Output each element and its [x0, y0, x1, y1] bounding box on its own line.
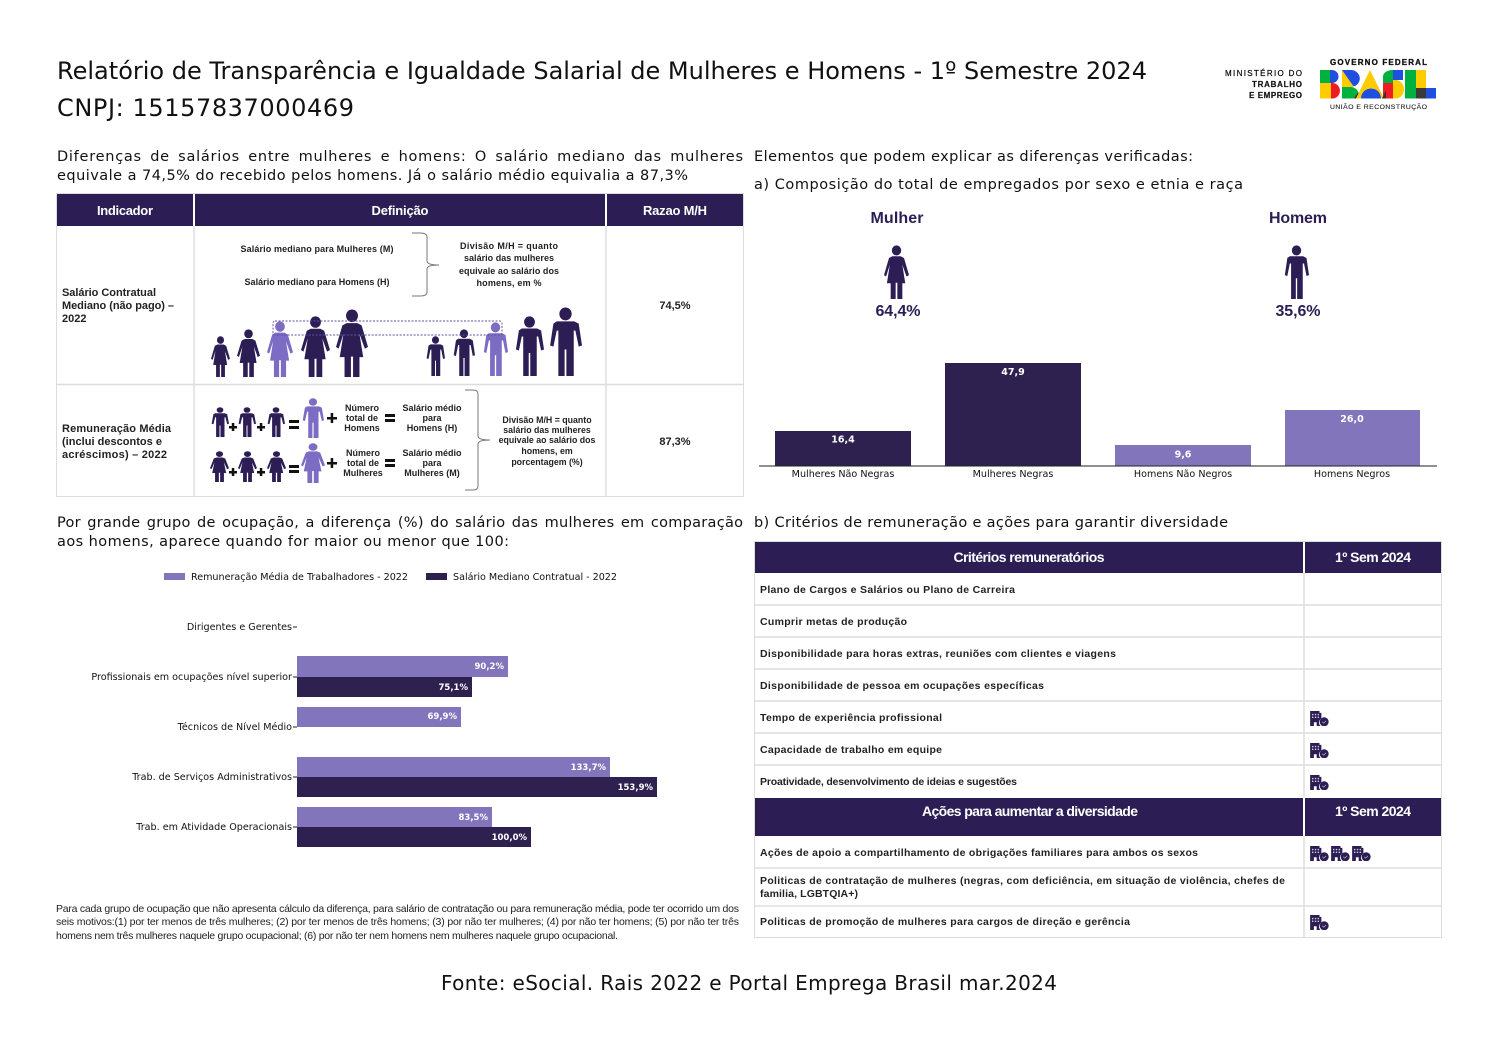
row: average pay: Divisão M/H = quanto [502, 415, 592, 425]
row: contractual median: equivale ao salário dos [459, 266, 559, 276]
row: average pay: equivale ao salário dos [499, 435, 596, 445]
heading: explanation elements: Elementos que podem explicar as diferenças verificadas: [754, 149, 1193, 165]
row: average pay: Homens [344, 423, 380, 433]
heading: explanation elements [754, 149, 1243, 193]
footnote: seis motivos:(1) por ter menos de três mulheres; (2) por ter menos de três homens; (3) por não ter mulheres; (4) por não ter homens; (5) por não ter três [56, 916, 739, 928]
bar chart: occupation: 133,7% [571, 763, 606, 773]
bar chart: composition: Homens Negros [1314, 469, 1390, 480]
text block: occupation groups: Por grande grupo de ocupação, a diferença (%) do salário das mulheres em comparação [57, 515, 743, 531]
criteria rows: Plano de Cargos e Salários ou Plano de Carreira [760, 584, 1015, 596]
stat: man 35,6%: Homem [1269, 210, 1327, 227]
row: contractual median: Salário mediano para Mulheres (M) [240, 244, 394, 254]
row: average pay: para [422, 458, 442, 468]
row: average pay: homens, em [521, 446, 573, 456]
bar chart: occupation: Profissionais em ocupações nível superior [91, 671, 292, 683]
criteria rows: Tempo de experiência profissional [760, 712, 942, 724]
row: contractual median: 74,5% [659, 300, 691, 312]
actions header [755, 798, 1441, 836]
bar chart: composition: 26,0 [1340, 414, 1364, 425]
criteria rows [760, 584, 1116, 788]
logo: Ministério do Trabalho e Emprego: MINISTÉRIO DO [1225, 69, 1302, 78]
row: average pay: Mulheres [343, 468, 383, 478]
bar chart: occupation: 100,0% [492, 833, 527, 843]
bar chart: occupation: Dirigentes e Gerentes [187, 622, 292, 633]
row: contractual median: Salário mediano para Homens (H) [244, 277, 390, 287]
bar chart: occupation: 153,9% [618, 783, 653, 793]
logo: Governo Federal Brasil: UNIÃO E RECONSTRUÇÃO [1330, 102, 1427, 111]
criteria rows: Disponibilidade para horas extras, reuniões com clientes e viagens [760, 648, 1116, 660]
stat: man 35,6% [1269, 210, 1327, 320]
row: average pay: Homens (H) [407, 423, 457, 433]
row: average pay: acréscimos) – 2022 [62, 449, 167, 461]
logo: Ministério do Trabalho e Emprego [1225, 69, 1302, 100]
logo: Ministério do Trabalho e Emprego: E EMPREGO [1249, 91, 1302, 100]
icons: company badges, criteria [1310, 711, 1329, 790]
row: contractual median: Salário Contratual [62, 287, 156, 299]
actions header: 1º Sem 2024 [1335, 803, 1411, 819]
row: contractual median: salário das mulheres [464, 253, 554, 263]
row: average pay: Salário médio [402, 448, 462, 458]
criteria rows: Disponibilidade de pessoa em ocupações específicas [760, 680, 1044, 692]
row: average pay: (inclui descontos e [62, 436, 162, 448]
heading: criteria: b) Critérios de remuneração e ações para garantir diversidade [754, 515, 1228, 531]
row: average pay: Número [345, 403, 379, 413]
bar chart: composition: Mulheres Negras [973, 469, 1053, 480]
row: average pay: Remuneração Média [62, 423, 172, 435]
logo: Governo Federal Brasil: GOVERNO FEDERAL [1330, 58, 1427, 67]
actions header: Ações para aumentar a diversidade [922, 803, 1138, 819]
row: average pay [62, 390, 691, 490]
title [57, 57, 1147, 122]
text block: occupation groups: aos homens, aparece quando for maior ou menor que 100: [57, 534, 509, 550]
criteria header [755, 542, 1441, 573]
bar chart: occupation: 90,2% [474, 662, 504, 672]
bar chart: occupation: 75,1% [438, 683, 468, 693]
stat: woman 64,4% [870, 210, 924, 320]
men formula [212, 398, 395, 438]
row: contractual median: 2022 [62, 313, 86, 325]
row: contractual median: Mediano (não pago) – [62, 300, 174, 312]
bar chart: composition: Mulheres Não Negras [792, 469, 894, 480]
title: Relatório de Transparência e Igualdade Salarial de Mulheres e Homens - 1º Semestre 2024 [57, 57, 1147, 85]
bar chart: occupation [91, 622, 657, 847]
title: CNPJ: 15157837000469 [57, 94, 354, 122]
bar chart: composition: Homens Não Negros [1134, 469, 1232, 480]
logo: Governo Federal Brasil [1320, 58, 1436, 111]
people: women and men by salary [211, 307, 582, 377]
row: average pay: salário das mulheres [503, 425, 591, 435]
action rows: Politicas de promoção de mulheres para cargos de direção e gerência [760, 916, 1130, 928]
stat: man 35,6%: 35,6% [1276, 303, 1320, 320]
row: average pay: Mulheres (M) [404, 468, 460, 478]
row: contractual median: Divisão M/H = quanto [460, 241, 558, 251]
text block: salary differences [57, 149, 743, 184]
table: indicators [56, 194, 744, 496]
bar chart: composition: 47,9 [1001, 367, 1025, 378]
criteria rows: Capacidade de trabalho em equipe [760, 744, 942, 756]
criteria header: 1º Sem 2024 [1335, 549, 1411, 565]
row: contractual median: homens, em % [476, 278, 542, 288]
bar chart: occupation: Técnicos de Nível Médio [177, 721, 292, 733]
bar chart: occupation: Trab. em Atividade Operacionais [135, 822, 292, 833]
action rows: Ações de apoio a compartilhamento de obrigações familiares para ambos os sexos [760, 847, 1198, 859]
action rows [760, 847, 1285, 928]
table: criteria and actions [754, 542, 1442, 938]
legend: Remuneração Média de Trabalhadores - 2022 [191, 571, 408, 583]
bar chart: composition: 9,6 [1175, 450, 1192, 460]
legend: Salário Mediano Contratual - 2022 [453, 571, 617, 583]
criteria rows: Proatividade, desenvolvimento de ideias e sugestões [760, 776, 1017, 788]
bar chart: occupation: 83,5% [458, 813, 488, 823]
action rows: familia, LGBTQIA+) [760, 888, 858, 900]
row: average pay: porcentagem (%) [511, 457, 583, 467]
row: average pay: Número [346, 448, 380, 458]
criteria header: Critérios remuneratórios [954, 549, 1105, 565]
footnote [56, 903, 739, 942]
row: average pay: total de [347, 458, 379, 468]
table header [57, 194, 743, 226]
stat: woman 64,4%: 64,4% [876, 303, 920, 320]
footnote: homens nem três mulheres naquele grupo ocupacional; (6) por não ter nem homens nem mulheres naquele grupo ocupacional. [56, 930, 618, 942]
women formula [210, 443, 395, 483]
bar chart: composition [759, 363, 1437, 480]
table header: Definição [372, 203, 429, 218]
text block: salary differences: equivale a 74,5% do recebido pelos homens. Já o salário médio equivalia a 87,3% [57, 168, 688, 184]
row: average pay: total de [346, 413, 378, 423]
icons: company badges, actions [1310, 846, 1371, 930]
bar chart: occupation: 69,9% [428, 712, 457, 722]
row: average pay: para [422, 413, 442, 423]
heading: explanation elements: a) Composição do total de empregados por sexo e etnia e raça [754, 177, 1243, 193]
bar chart: composition: 16,4 [831, 434, 855, 446]
bar chart: occupation: Trab. de Serviços Administrativos [131, 772, 292, 783]
footnote: Para cada grupo de ocupação que não apresenta cálculo da diferença, para salário de contratação ou para remuneração média, pode ter ocorrido um dos [56, 903, 739, 915]
row: average pay: 87,3% [659, 436, 691, 448]
logo: Ministério do Trabalho e Emprego: TRABALHO [1252, 80, 1302, 89]
source: Fonte: eSocial. Rais 2022 e Portal Emprega Brasil mar.2024 [441, 971, 1057, 995]
table header: Indicador [97, 203, 153, 218]
row: average pay: Salário médio [402, 403, 462, 413]
row: contractual median [62, 233, 691, 377]
legend [164, 571, 617, 583]
text block: salary differences: Diferenças de salários entre mulheres e homens: O salário mediano das mulheres [57, 149, 743, 165]
stat: woman 64,4%: Mulher [870, 210, 924, 227]
table header: Razao M/H [643, 203, 707, 218]
criteria rows: Cumprir metas de produção [760, 616, 907, 628]
text block: occupation groups [57, 515, 743, 550]
action rows: Politicas de contratação de mulheres (negras, com deficiência, em situação de violência, chefes de [760, 875, 1285, 887]
